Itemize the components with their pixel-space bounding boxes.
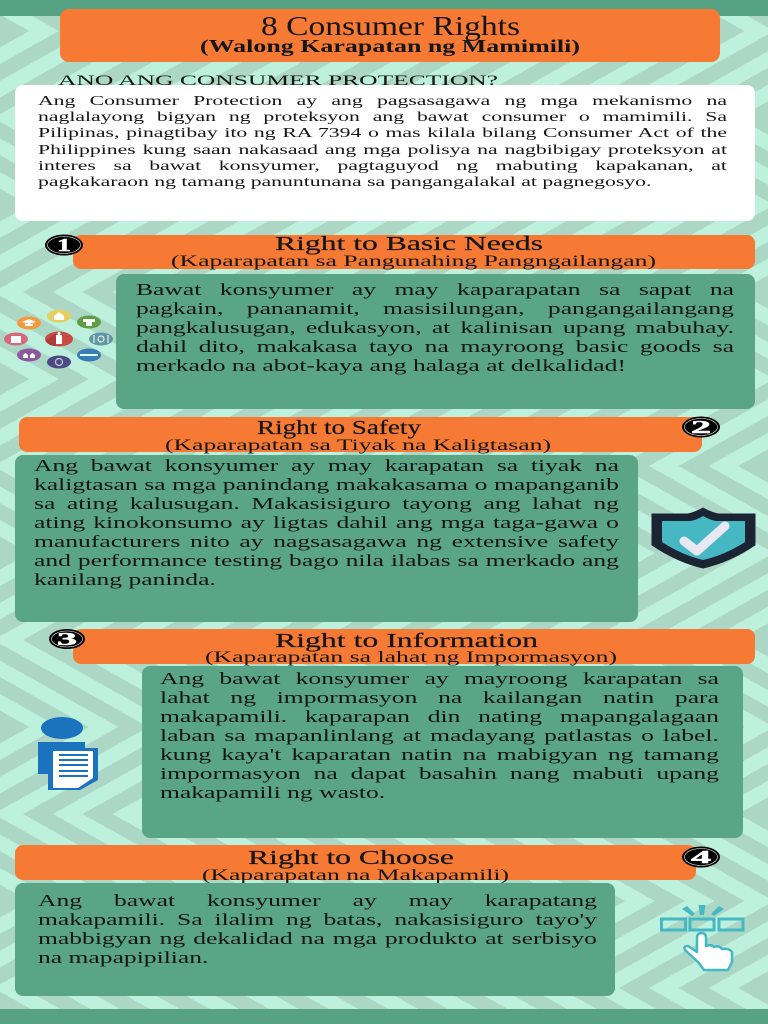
number badge 2: 2 bbox=[691, 417, 711, 437]
section body text: lahat ng impormasyon na kailangan natin para bbox=[160, 688, 719, 706]
panel: consumer protection intro bbox=[15, 85, 755, 221]
section body text: Ang bawat konsyumer ay may karapatang bbox=[38, 890, 597, 910]
intro paragraph: Pilipinas, pinagtibay ito ng RA 7394 o mas kilala bilang Consumer Act of the bbox=[38, 126, 727, 141]
title banner bbox=[60, 9, 720, 62]
title: 8 Consumer Rights: 8 Consumer Rights bbox=[261, 11, 520, 41]
section body text: na mapapipilian. bbox=[38, 948, 208, 966]
section title: Right to Basic Needs bbox=[275, 233, 543, 255]
section body text: makapamili. Sa ilalim ng batas, nakasisiguro tayo'y bbox=[38, 910, 597, 928]
section body text bbox=[34, 456, 619, 588]
icon: person with document bbox=[38, 717, 98, 790]
number badge 3 bbox=[49, 629, 85, 649]
section subtitle: (Kaparapatan sa Tiyak na Kaligtasan) bbox=[165, 437, 551, 454]
icon: basic needs circles bbox=[4, 310, 113, 368]
section title: Right to Choose bbox=[248, 847, 454, 869]
text panel bbox=[116, 274, 755, 409]
section 1: right to basic needs bbox=[4, 233, 755, 409]
intro paragraph: naglalayong bigyan ng proteksyon ang bawat consumer o mamimili. Sa bbox=[38, 110, 727, 125]
number badge 2 bbox=[682, 416, 720, 438]
section 2: right to safety bbox=[15, 416, 756, 622]
heading bar bbox=[15, 845, 696, 880]
heading: Ano ang consumer protection: ANO ANG CONSUMER PROTECTION? bbox=[58, 73, 499, 89]
number badge 3: 3 bbox=[57, 629, 77, 649]
intro paragraph: Philippines kung saan nakasaad ang mga polisya na nagbibigay proteksyon at bbox=[38, 143, 727, 158]
section body text: kaligtasan sa mga panindang makakasama o mapanganib bbox=[34, 474, 619, 494]
section body text: Ang bawat konsyumer ay mayroong karapatan sa bbox=[160, 668, 719, 688]
section body text: Ang bawat konsyumer ay may karapatan sa tiyak na bbox=[34, 456, 619, 474]
text panel bbox=[15, 455, 638, 622]
section body text bbox=[160, 668, 719, 802]
section subtitle: (Kaparapatan na Makapamili) bbox=[202, 867, 509, 884]
intro paragraph bbox=[38, 94, 727, 190]
section body text bbox=[38, 890, 597, 966]
number badge 1 bbox=[45, 234, 83, 256]
heading bar bbox=[19, 417, 702, 452]
section body text: manufacturers nito ay nagsasagawa ng extensive safety bbox=[34, 532, 619, 550]
subtitle: Walong Karapatan ng Mamimili: (Walong Karapatan ng Mamimili) bbox=[200, 36, 580, 57]
number badge 1: 1 bbox=[57, 235, 71, 255]
number badge 4: 4 bbox=[691, 847, 711, 867]
section 4: right to choose bbox=[15, 845, 744, 996]
section title: Right to Safety bbox=[257, 417, 421, 439]
section body text: pagkain, pananamit, masisilungan, pangangailangang bbox=[136, 298, 734, 318]
section title: Right to Information bbox=[275, 630, 538, 652]
heading bar bbox=[73, 629, 755, 664]
section body text: sa ating kalusugan. Makasisiguro tayong ang lahat ng bbox=[34, 494, 619, 512]
icon: shield with check bbox=[652, 508, 755, 568]
section body text: laban sa mapanlinlang at madayang patlastas o label. bbox=[160, 726, 719, 744]
section subtitle: (Kaparapatan sa Pangunahing Pangngailangan) bbox=[171, 253, 656, 270]
section body text: Bawat konsyumer ay may kaparapatan sa sapat na bbox=[136, 280, 734, 298]
section body text: and performance testing bago nila ilabas sa merkado ang bbox=[34, 550, 619, 570]
section body text: kanilang paninda. bbox=[34, 570, 216, 588]
section body text: dahil dito, makakasa tayo na mayroong basic goods sa bbox=[136, 336, 734, 356]
section body text: makapamili ng wasto. bbox=[160, 782, 385, 802]
intro paragraph: Ang Consumer Protection ay ang pagsasagawa ng mga mekanismo na bbox=[38, 94, 727, 109]
section body text bbox=[136, 280, 734, 374]
intro paragraph: interes sa bawat konsyumer, pagtaguyod ng mabuting kapakanan, at bbox=[38, 159, 727, 174]
section body text: impormasyon na dapat basahin nang mabuti upang bbox=[160, 764, 719, 782]
number badge 4 bbox=[682, 846, 720, 868]
section body text: kung kaya't kaparatan natin na mabigyan ng tamang bbox=[160, 744, 719, 764]
section body text: mabbigyan ng dekalidad na mga produkto at serbisyo bbox=[38, 928, 597, 948]
heading bar bbox=[73, 235, 755, 269]
section body text: pangkalusugan, edukasyon, at kalinisan upang mabuhay. bbox=[136, 318, 734, 336]
intro paragraph: pagkakaraon ng tamang panuntunana sa pangangalakal at pagnegosyo. bbox=[38, 175, 651, 190]
section 3: right to information bbox=[38, 629, 755, 838]
section body text: merkado na abot-kaya ang halaga at delkalidad! bbox=[136, 356, 626, 374]
text panel bbox=[15, 883, 615, 996]
section body text: makapamili. kaparapan din nating mapangalagaan bbox=[160, 706, 719, 726]
section subtitle: (Kaparapatan sa lahat ng Impormasyon) bbox=[205, 649, 617, 666]
text panel bbox=[142, 666, 743, 838]
icon: hand selecting option bbox=[662, 905, 743, 970]
section body text: ating kinokonsumo ay ligtas dahil ang mga taga-gawa o bbox=[34, 512, 619, 532]
